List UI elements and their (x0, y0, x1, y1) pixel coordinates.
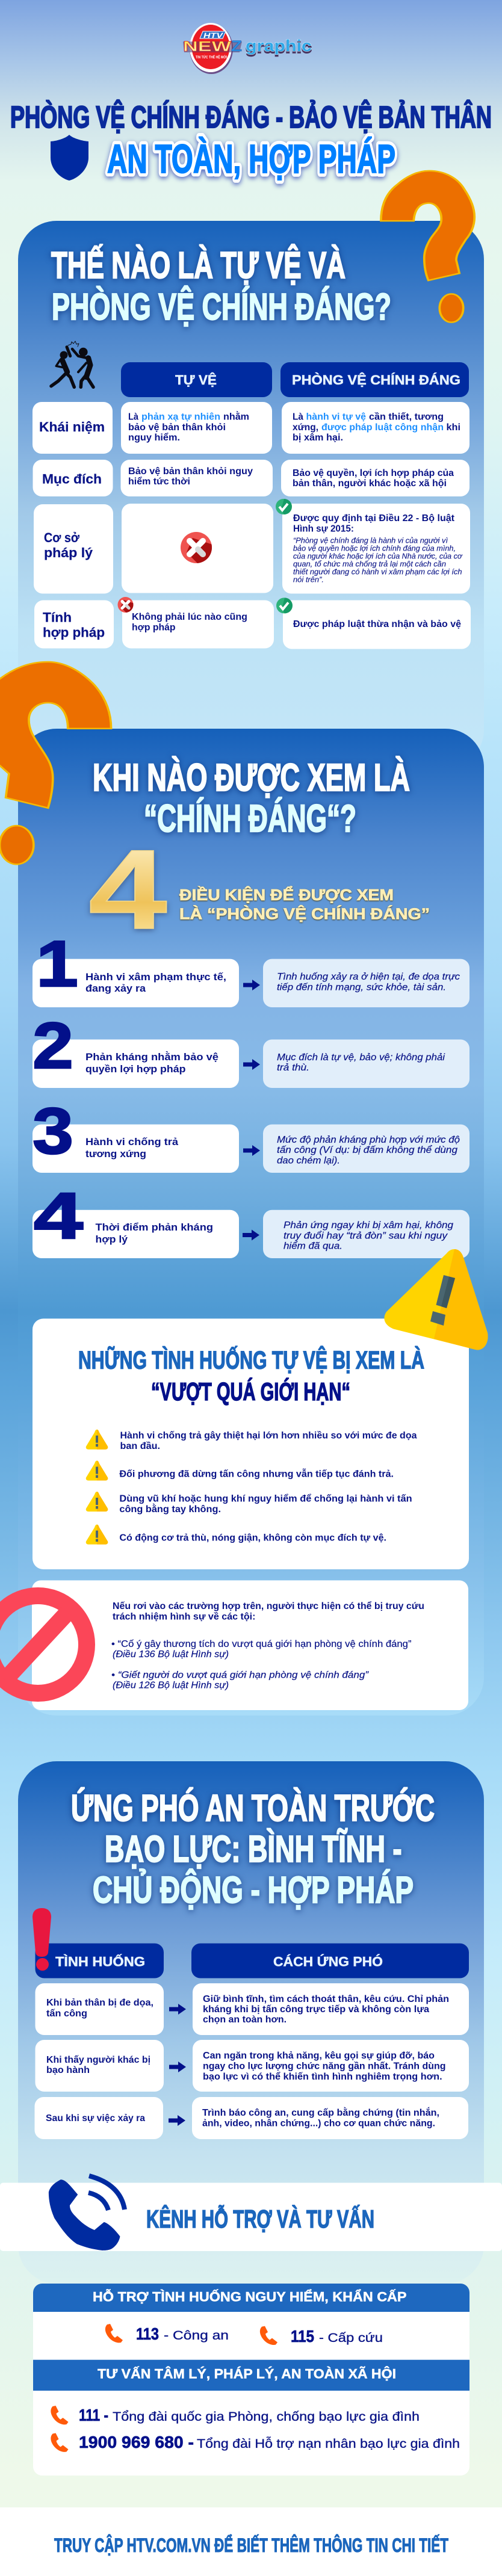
arrow (169, 2062, 186, 2072)
hotline 1900 969 680 (51, 2433, 460, 2452)
table header: self defence (121, 362, 272, 397)
row: others abused (35, 2040, 469, 2092)
logo: HTV Newz graphic (183, 23, 312, 74)
row: purpose: Mục đích (42, 472, 102, 486)
hotline 113: - Công an (164, 2329, 229, 2343)
row: legal basis: “Phòng vệ chính đáng là hành vi của người vì (293, 537, 448, 545)
header: counselling (33, 2360, 469, 2391)
hotline 113 (105, 2324, 229, 2343)
panel: when is defence legitimate (0, 729, 488, 1716)
item 3: công bằng tay không. (119, 1504, 221, 1515)
heading: THẾ NÀO LÀ TỰ VỆ VÀ (51, 245, 346, 286)
row: others abused: bạo lực vì có thể khiến tình hình nghiêm trọng hơn. (203, 2072, 442, 2082)
logo: HTV Newz graphic: graphic (246, 37, 312, 55)
icon: two people fighting (51, 341, 93, 387)
item 3 (86, 1492, 412, 1515)
condition 1 (33, 927, 469, 1007)
header: counselling: TƯ VẤN TÂM LÝ, PHÁP LÝ, AN TOÀN XÃ HỘI (98, 2366, 396, 2381)
row: legal basis: quan, tổ chức mà chống trả lại một cách cần (293, 560, 446, 568)
hotline 111: Tổng đài quốc gia Phòng, chống bạo lực gia đình (113, 2410, 420, 2424)
condition 3: 3 (33, 1095, 73, 1168)
heading (93, 756, 410, 840)
icon: orange question mark top right (381, 171, 474, 323)
row: purpose: hiểm tức thời (128, 477, 190, 487)
row: others abused: Khi thấy người khác bị (46, 2055, 150, 2065)
hotline 111: 111 - (79, 2406, 108, 2424)
footer (0, 2507, 502, 2576)
row: concept: hành vi tự vệ (306, 412, 366, 422)
arrow (169, 2115, 185, 2126)
item 1 (86, 1430, 417, 1451)
banner heading: KÊNH HỖ TRỢ VÀ TƯ VẤN (146, 2204, 374, 2233)
condition 4 (33, 1179, 469, 1258)
card: exceeding limits (33, 1318, 469, 1569)
row: threatened: chọn an toàn hơn. (203, 2015, 287, 2025)
row: legality: Tính (43, 610, 72, 625)
row: legality: hợp pháp (43, 625, 105, 640)
row: concept (33, 402, 469, 454)
table header: situation (35, 1944, 164, 1978)
item 4 (86, 1525, 386, 1545)
panel: hotlines (33, 2284, 469, 2476)
hotline 115: - Cấp cứu (319, 2331, 383, 2345)
row: legal basis: pháp lý (44, 545, 93, 560)
row: legality: hợp pháp (132, 622, 176, 633)
row: legality: Không phải lúc nào cũng (132, 612, 247, 622)
heading (51, 245, 391, 328)
header: emergency: HỖ TRỢ TÌNH HUỐNG NGUY HIỂM, KHẨN CẤP (93, 2289, 407, 2305)
card: legal liability: • “Cố ý gây thương tích do vượt quá giới hạn phòng vệ chính đáng” (111, 1639, 412, 1649)
hotline 1900 969 680: Tổng đài Hỗ trợ nạn nhân bạo lực gia đình (197, 2437, 460, 2451)
condition 4: 4 (34, 1179, 84, 1253)
condition 3: tương xứng (85, 1148, 146, 1160)
item 1: ban đầu. (120, 1441, 160, 1451)
condition 3: tấn công (Ví dụ: bị đấm không thể dùng (277, 1145, 457, 1155)
hotline 115: 115 (291, 2327, 314, 2346)
panel: safe response to violence (18, 1761, 484, 2284)
icon: shield (51, 135, 88, 181)
card: legal liability: (Điều 126 Bộ luật Hình sự) (113, 1681, 229, 1691)
row: legal basis (34, 499, 470, 593)
icon: green check (276, 499, 292, 514)
condition 4: hợp lý (95, 1234, 128, 1245)
heading accent: “VƯỢT QUÁ GIỚI HẠN“ (151, 1377, 350, 1406)
condition 1: tiếp đến tính mạng, sức khỏe, tài sản. (277, 982, 446, 992)
arrow (243, 1230, 259, 1241)
card: legal liability (32, 1580, 468, 1710)
row: others abused: bạo hành (46, 2065, 90, 2075)
row: legal basis: bảo vệ quyền hoặc lợi ích chính đáng của mình, (293, 544, 456, 552)
condition 2 (33, 1009, 469, 1088)
icon: prohibition sign (0, 1596, 87, 1693)
heading (71, 1788, 435, 1911)
main title (10, 99, 492, 182)
row: concept: Khái niệm (39, 419, 105, 434)
row: concept: nguy hiểm. (128, 433, 180, 443)
heading: “CHÍNH ĐÁNG“? (144, 797, 356, 840)
hotline 115 (260, 2326, 383, 2346)
row: purpose: Bảo vệ bản thân khỏi nguy (128, 466, 253, 477)
row: concept: phản xạ tự nhiên (141, 412, 220, 422)
hotline 1900 969 680: 1900 969 680 - (79, 2433, 194, 2451)
arrow (243, 980, 260, 990)
icon: telephone (49, 2176, 125, 2250)
banner: support channels (0, 2176, 502, 2251)
condition 1: Hành vi xâm phạm thực tế, (85, 971, 226, 983)
condition 2: Phản kháng nhằm bảo vệ (85, 1051, 218, 1063)
logo: HTV Newz graphic: Z (231, 38, 242, 55)
logo: HTV Newz graphic: graphic (246, 39, 312, 57)
item 2: Đối phương đã dừng tấn công nhưng vẫn tiếp tục đánh trả. (119, 1469, 394, 1479)
condition 2: 2 (33, 1009, 73, 1083)
row: purpose: Bảo vệ quyền, lợi ích hợp pháp của (293, 468, 454, 478)
arrow (243, 1145, 260, 1156)
row: purpose: bản thân, người khác hoặc xã hội (293, 478, 447, 489)
condition 3 (33, 1095, 469, 1173)
logo: HTV Newz graphic: HTV (203, 31, 223, 40)
hotline 113: 113 (136, 2324, 159, 2343)
row: concept: xứng, (293, 422, 318, 433)
row: threatened: Khi bản thân bị đe dọa, (46, 1998, 153, 2008)
row: legality (34, 597, 471, 649)
condition 3: Mức độ phản kháng phù hợp với mức độ (277, 1135, 460, 1145)
condition 3: dao chém lại). (277, 1156, 340, 1166)
condition 3: Hành vi chống trả (85, 1136, 179, 1147)
row: concept: được pháp luật công nhận (321, 422, 444, 433)
condition 2: Mục đích là tự vệ, bảo vệ; không phải (277, 1052, 445, 1063)
row: legal basis: thiết người đang có hành vi xâm phạm các lợi ích (293, 567, 462, 576)
row: concept: bị xâm hại. (293, 433, 343, 443)
arrow (169, 2004, 186, 2015)
table header: response: CÁCH ỨNG PHÓ (273, 1954, 383, 1969)
condition 2: quyền lợi hợp pháp (85, 1063, 185, 1075)
row: after incident: Trình báo công an, cung cấp bằng chứng (tin nhắn, (202, 2107, 439, 2118)
card: legal liability: (Điều 136 Bộ luật Hình sự) (113, 1649, 229, 1660)
row: threatened: Giữ bình tĩnh, tìm cách thoát thân, kêu cứu. Chỉ phản (203, 1994, 449, 2004)
big number 4 with subtitle (88, 826, 430, 953)
icon: red cross (181, 532, 214, 566)
table header: legitimate defence: PHÒNG VỆ CHÍNH ĐÁNG (292, 372, 460, 388)
card: legal liability: Nếu rơi vào các trường hợp trên, người thực hiện có thể bị truy cứu (113, 1601, 424, 1611)
row: legality: Được pháp luật thừa nhận và bảo vệ (293, 619, 461, 629)
item 4: Có động cơ trả thù, nóng giận, không còn mục đích tự vệ. (119, 1533, 386, 1543)
row: after incident: ảnh, video, nhân chứng...) cho cơ quan chức năng. (202, 2119, 435, 2129)
header: emergency (33, 2284, 469, 2312)
row: concept: cần thiết, tương (369, 412, 444, 422)
row: legal basis: Hình sự 2015: (293, 524, 354, 534)
heading: BẠO LỰC: BÌNH TĨNH - (105, 1829, 402, 1870)
row: others abused: Can ngăn trong khả năng, kêu gọi sự giúp đỡ, báo (203, 2051, 435, 2061)
icon: large warning triangle (384, 1249, 488, 1350)
big number 4 with subtitle: ĐIỀU KIỆN ĐỂ ĐƯỢC XEM (179, 886, 394, 904)
item 3: Dùng vũ khí hoặc hung khí nguy hiểm để chống lại hành vi tấn (119, 1494, 412, 1504)
row: concept: bảo vệ bản thân khỏi (128, 422, 226, 433)
card: legal liability: trách nhiệm hình sự về các tội: (113, 1611, 255, 1622)
logo: HTV Newz graphic: TIN TỨC THẾ HỆ MỚI (196, 55, 227, 60)
table header: response (191, 1944, 469, 1978)
big number 4 with subtitle: 4 (88, 826, 167, 953)
arrow (243, 1059, 260, 1070)
condition 1: 1 (36, 927, 78, 1001)
row: concept: Là (128, 412, 138, 422)
table header: self defence: TỰ VỆ (175, 372, 217, 388)
hotline 111 (51, 2406, 420, 2424)
icon: small cross (118, 597, 135, 614)
row: concept: nhằm (223, 412, 249, 422)
row: after incident: Sau khi sự việc xảy ra (46, 2113, 145, 2124)
row: threatened (35, 1983, 469, 2035)
row: legal basis: Được quy định tại Điều 22 - Bộ luật (293, 513, 454, 524)
panel: what is self defence (18, 221, 484, 768)
big number 4 with subtitle: LÀ “PHÒNG VỆ CHÍNH ĐÁNG” (179, 905, 430, 923)
icon: red exclamation (33, 1908, 51, 1971)
logo: HTV Newz graphic: NEW (183, 39, 231, 55)
row: threatened: tấn công (46, 2009, 87, 2019)
condition 4: truy đuổi hay “trả đòn” sau khi nguy (284, 1231, 448, 1241)
condition 1: Tình huống xảy ra ở hiện tại, đe dọa trực (277, 972, 460, 982)
icon: small check (276, 598, 293, 613)
row: concept: khi (447, 422, 460, 433)
condition 4: Phản ứng ngay khi bị xâm hại, không (284, 1220, 453, 1231)
row: threatened: kháng khi bị tấn công trực tiếp và không còn lựa (203, 2004, 429, 2015)
table header: situation: TÌNH HUỐNG (55, 1953, 145, 1969)
icon: orange question mark left (0, 662, 111, 864)
table header: legitimate defence (280, 362, 469, 397)
row: legal basis: Cơ sở (44, 530, 79, 545)
card: legal liability: • “Giết người do vượt quá giới hạn phòng vệ chính đáng” (111, 1670, 369, 1681)
row: purpose (33, 460, 469, 496)
row: legal basis: của người khác hoặc lợi ích của Nhà nước, của cơ (293, 552, 463, 560)
condition 1: đang xảy ra (85, 983, 146, 994)
item 2 (86, 1461, 394, 1480)
condition 4: Thời điểm phản kháng (95, 1222, 213, 1233)
condition 4: hiểm đã qua. (284, 1241, 342, 1252)
item 1: Hành vi chống trả gây thiệt hại lớn hơn nhiều so với mức đe dọa (120, 1430, 417, 1441)
row: others abused: ngay cho lực lượng chức năng gần nhất. Tránh dùng (203, 2062, 445, 2072)
row: legal basis: nói trên”. (293, 575, 324, 584)
row: concept: Là (293, 412, 303, 422)
row: after incident (35, 2097, 468, 2139)
condition 2: trả thù. (277, 1063, 309, 1073)
